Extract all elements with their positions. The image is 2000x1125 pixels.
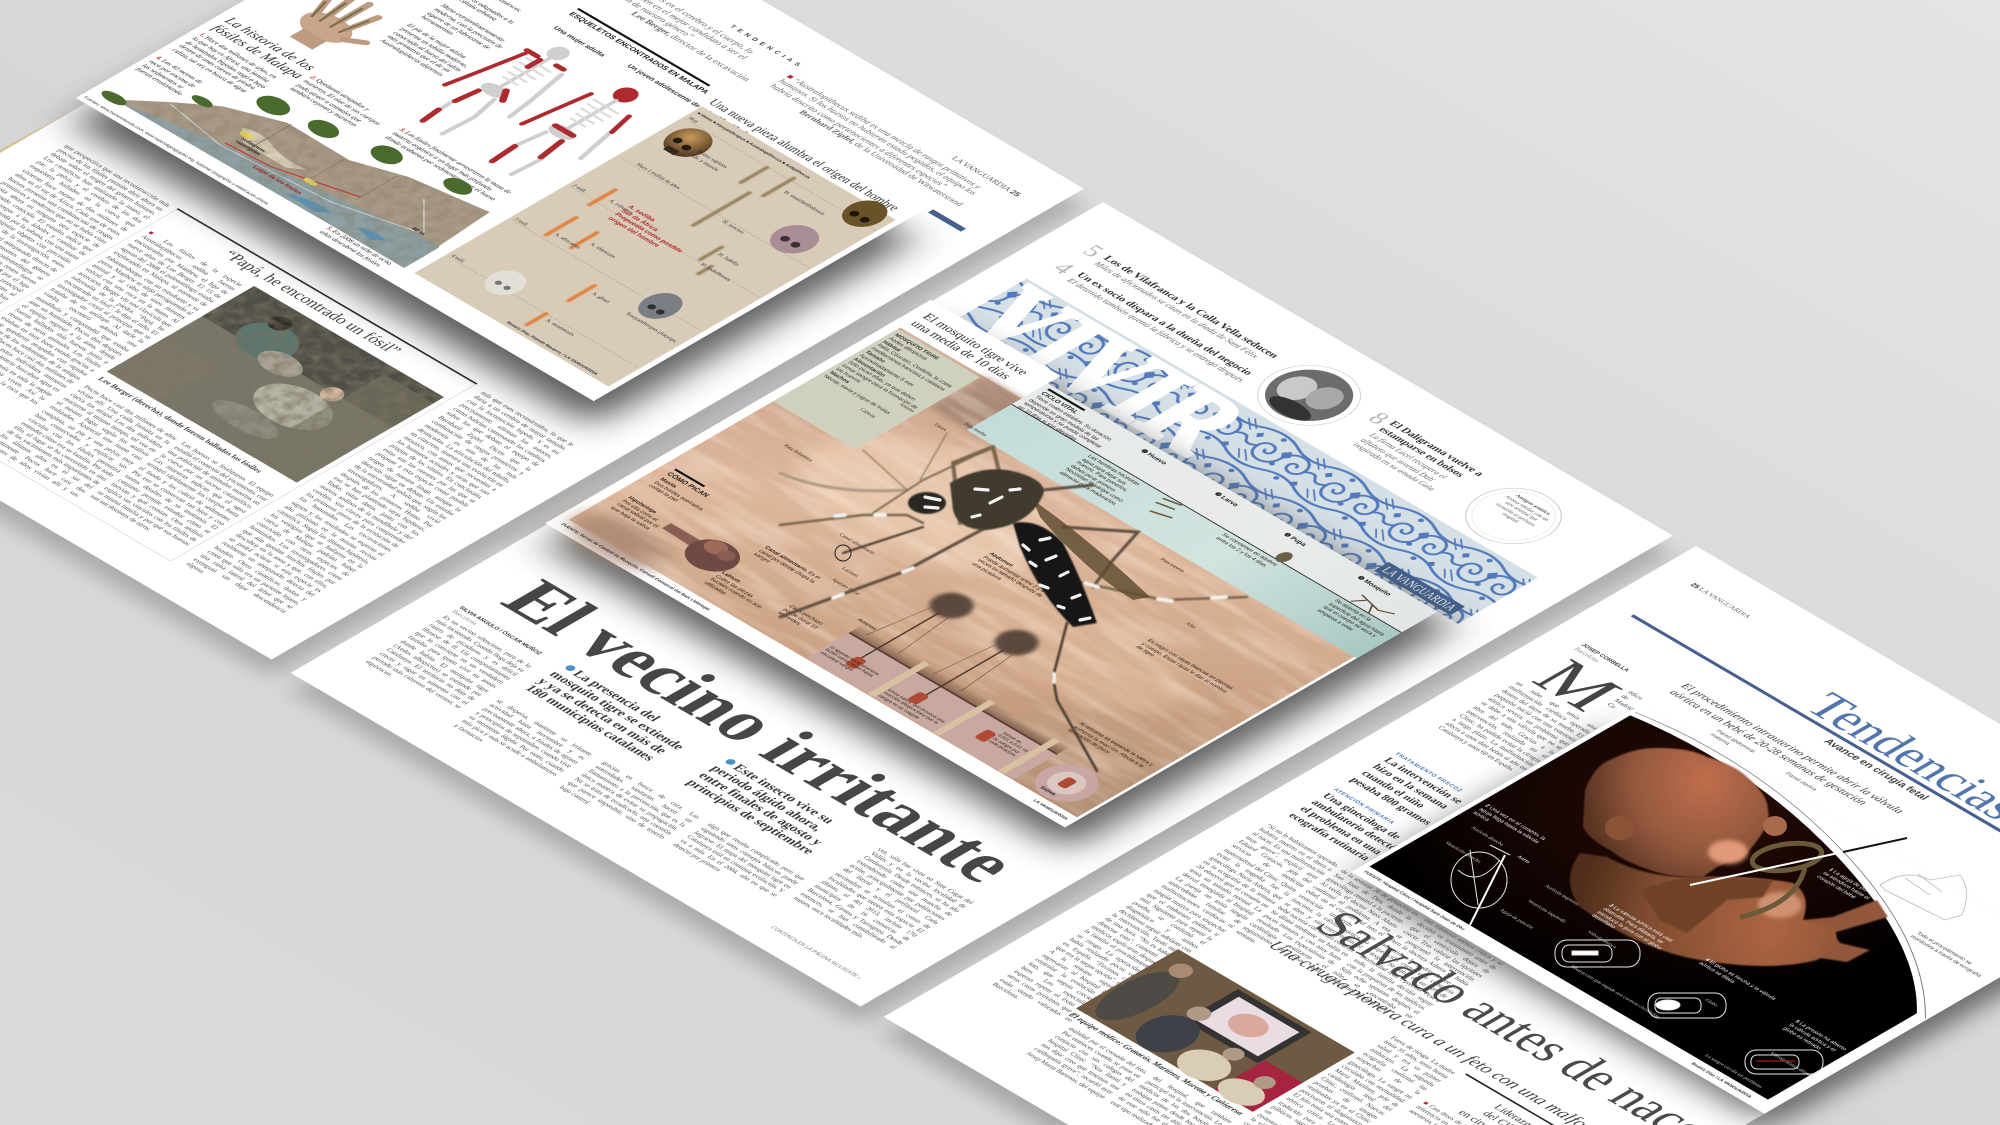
source credit: FUENTE: Hospital Clínic / Hospital Sant Joan de Déu <box>1363 870 1467 931</box>
time labels: 3 mill. <box>512 217 530 228</box>
panel: mosquito facts: Sólo pican ellas, ya que deben tomar sangre para la formación de los huevos <box>834 360 919 410</box>
label: pared abdominal: Pared abdominal materna <box>1708 729 1756 754</box>
species labels: Kenyanthropus platyops <box>624 312 679 344</box>
deck 2: entre finales de agosto y <box>695 770 827 847</box>
floating card: fetal surgery infographic <box>1345 694 2000 1121</box>
red callout: A. sediba: Sur de África <box>619 208 660 232</box>
panel: mosquito facts: Machos <box>828 371 851 384</box>
deck 1: 180 municipios catalanes <box>522 683 659 763</box>
step captions <box>1431 735 1996 1065</box>
text: labium <box>699 571 778 617</box>
article column 1: Es un vecino silencioso, pero de lo más incómodo. Cuando llega deja su rastro de picaduras y es difícil librarse de él. Un comportamiento que lo convierte en un verdadero fastidio para quien vive en zonas donde habita. El mosquito tigre (Aedes albopictus) se extiende por Catalunya. El territorio no deja de crecer y sigue en aumento con el periodo más caluroso del verano; se equivocan. <box>363 615 533 710</box>
title: La historia de los fósiles de Malapa: fósiles de Malapa <box>207 23 307 81</box>
illustration label: sedimentos: Sedimentos <box>239 137 267 153</box>
mosquito abdomen <box>1013 522 1097 627</box>
mosquito head <box>908 492 946 514</box>
note: ecografía: Todo el procedimiento se monitoriza a través de ecografía <box>1909 931 1983 978</box>
text column: bones explained: Mano extraordinariamente moderna, con la precisión de agarre de un fabricante de herramientas <box>418 3 507 50</box>
article intro: un niño que tenía una malformación cardíaca operada dentro del útero de su madre. El pequeño nació con una estenosis aórtica severa, un problema que se debe a una válvula que no se abre del todo. Gracias a la intervención, realizada en el Clínic, ha podido evitar la cirugía a largo plazo. La malformación afecta a unos diez bebés al año en Catalunya y unos 60 en España. <box>1436 681 1599 772</box>
time labels: 4 mill. <box>449 254 467 264</box>
brown species bars <box>641 165 828 274</box>
skeleton: adult woman <box>401 31 597 145</box>
photo caption: El equipo médico: Gratacós, Martínez, Moretta y Cañiaresa <box>1066 1011 1246 1116</box>
umbilical cord <box>1740 839 1823 917</box>
article column 3: una estenosis aórtica crítica y se decidió su tratamiento antes de que el ventrículo dejara de crecer. Tras valorar las opciones se programó la intervención. Pero la doctora Adsera ya había advertido a los padres de que una operación como esta comporta riesgo. “Se habla de un 10% de mortalidad fetal”, precisó. Pese a todo, la familia decidió seguir con la propuesta de los médicos. Sólo ocho semanas después el niño se encontraba en condiciones de nacer sano. <box>1323 918 1505 1020</box>
skeleton subtitle: mujer adulta: Una mujer adulta <box>551 26 606 58</box>
sidebar: atención primaria <box>1286 787 1420 865</box>
quote: Bernhard Zipfel: Bernhard Zipfel, de la Universidad de Witwatersrand <box>797 109 966 208</box>
deck 1 <box>522 662 700 766</box>
sidebar: atención primaria: ATENCIÓN PRIMARIA <box>1331 787 1397 825</box>
fetus belly highlight <box>1758 892 1802 918</box>
deck 1: La presencia del <box>570 668 664 724</box>
mosquito stripes <box>925 489 1090 620</box>
sidebar text: cuando el niño <box>1358 769 1428 810</box>
timeline text 3: 3. Los fósiles finalmente arrastraron la masa de materia orgánica a un lugar más profundo donde acabaron por sedimentarse con el hueso <box>384 127 513 202</box>
panel: mosquito facts: Italia, Cáucaso, Cerdeña, la costa mediterránea francesa y catalana <box>869 343 953 392</box>
box: Liderazgo del Clínic <box>1222 1074 1648 1125</box>
timeline text 2: 2. Quedaron atrapados y murieron. El olor de sus cuerpos pudo atraer a animales que también cayeron y murieron <box>288 75 382 128</box>
text: antenas: Antenas <box>855 618 878 631</box>
text: reaction: Al retirarse se expande la saliva y aumenta la reacción. Afecta a la sensación de picor <box>1066 722 1155 768</box>
panel: mosquito facts: Alimentación <box>851 357 887 378</box>
quote: Lee Berger: Lee Berger, director de la excavación <box>629 10 753 83</box>
page: Vivir mosquito <box>273 201 1688 1025</box>
item 8 number: 8 <box>1362 409 1395 428</box>
item 4 number: 4 <box>1047 259 1080 278</box>
mosquito wing <box>1033 500 1150 600</box>
item 4 subhead: El detenido también quemó la fábrica y se entregó después <box>1064 276 1247 383</box>
source credit: Fuentes: www.homininfossils.com, www.nationalgeographic.org, National Geographic y elaboración propia <box>83 95 271 205</box>
title: Una nueva pieza alumbra el origen del hombre: Una nueva pieza alumbra el origen del hombre <box>705 97 904 213</box>
text: canal alimentario: Canal alimentario. Es el canal por donde chupa la sangre <box>751 546 822 584</box>
text: stage 1: El aparato bucal atraviesa la piel varias veces hasta encontrar sangre <box>818 646 880 678</box>
heart diagram <box>1451 845 1510 925</box>
timeline text 5: 5. En 2008 un niño de ocho años descubrió los fósiles <box>318 226 393 268</box>
sidebar text column 3: Los huesos se fosilizaron. El equipo estudió el contexto del yacimiento, con una población de animales muertos en la cueva por un suceso catastrófico. Las muestras indican que el agua arrastró rápidamente los cuerpos hasta el fondo y los cubrió de sedimento. Por eso se conservan tan bien y con tantos detalles de su anatomía. El conjunto permite estudiar cómo se movían y qué comían. Otro análisis explica sus vínculos con los fósiles de su misma familia y por qué sus huesos son tan distintos de otros. <box>88 441 276 547</box>
credit: Beatriz Díaz, Ramón Navarro, / LA VANGUARDIA <box>505 321 600 376</box>
skull: Ardipithecus <box>476 266 535 300</box>
sidebar text <box>1286 792 1412 865</box>
heart labels: Globo <box>1703 998 1720 1008</box>
floating card: fossil infographics <box>52 0 954 427</box>
panel: mosquito facts: MOSQUITO TIGRE <box>893 333 940 361</box>
circular note: Antiguo asiático <box>1513 494 1552 516</box>
headline: El vecino irritante: El vecino irritante <box>484 569 1038 893</box>
icon: proboscis cross-section <box>646 517 751 578</box>
panel: mosquito facts: Aproximadamente 5 mm <box>857 354 915 387</box>
species labels: A. ghari <box>589 292 611 304</box>
illustration: Malapa cave cross-section <box>109 100 490 268</box>
article column 2: se dispersa, mantiene su irritante actividad hasta noviembre y es precisamente ahora, a finales de agosto y principios de septiembre, cuando vive su momento álgido. Por tanto, cuando más pica y más se acude a ambulatorios y farmacias. <box>452 699 594 777</box>
item 5 subhead: Miles de aficionados se citan en la diada de Sant Fèlix <box>1091 260 1262 359</box>
skull: Homo sapiens <box>653 122 723 163</box>
stage text: adult: Se asienta en la superficie del agua hasta que el cuerpo se seca y empieza a volar. <box>1315 599 1386 638</box>
text: maxila: Maxila <box>658 477 678 489</box>
sidebar text: hizo en la semana <box>1370 763 1452 811</box>
skull: Homo neanderthalensis <box>833 195 897 232</box>
stage text: pupa: Se convierten en adultos entre los 2 y los 4 días. <box>1214 533 1278 568</box>
article column 3: gracias en busca de cura. Las autoridades sanitarias hacen un llamamiento a la prevención, que es la única manera de evitar su propagación. No se trata de erradicarlo, una cuestión que parece imposible, sino de tenerlo bajo control. <box>558 761 701 840</box>
skeleton subtitle: joven adolescente: Un joven adolescente de entre 10 y 13 años <box>625 64 756 140</box>
valve diagram 2 <box>1648 993 1726 1018</box>
continuation note: CONTINÚA EN LA PÁGINA SIGUIENTE » <box>769 925 864 980</box>
text: abdomen: Puede aumentar entre 2 y 4 veces su tamaño después de una picadura <box>970 555 1047 598</box>
drop cap M: M <box>1516 650 1639 721</box>
orange species bars <box>455 190 687 325</box>
anatomical labels <box>691 381 1257 711</box>
valve diagram 1 <box>1555 940 1640 967</box>
panel: mosquito facts: Tamaño <box>863 350 887 364</box>
photo: medical team <box>1073 949 1355 1113</box>
text: step 1: 1 La aguja de punción se introduce hasta el corazón del bebé <box>1815 868 1880 900</box>
floating card: mosquito infographic <box>526 300 1471 851</box>
masthead: 25 LA VANGUARDIA <box>1688 582 1753 620</box>
photo caption: Lee Berger (derecha), donde fueron hallados los fósiles <box>96 375 264 474</box>
text column: bones explained: El pie de la mujer adulta presenta un tobillo moderno, conectado al hueso del talón más primitivo que el de un Australopithecus afarensis <box>378 23 470 77</box>
life-cycle heading <box>1047 389 1086 411</box>
timeline text 1: 1. Hace dos millones de años, en lo que hoy es África, una familia de homínidos bípedos vagó o bajó dentro de unas cuevas de piedra caliza, tal vez en busca de agua <box>170 32 278 94</box>
text: step 3: 3 La válvula aórtica está casi obstruida. Para dilatarla, se introduce la guía con el globo desinflado <box>1589 903 1674 950</box>
item 8 text: La firma Lacel recupera el alfabeto que inventó Dalí inspirado en su amada Gala <box>1351 432 1449 492</box>
text: step 4: 4 El globo se hincha y la válvula aórtica se dilata <box>1697 958 1777 1001</box>
legend: ■ Homo ■ Kenyanthropus ■ Australopithecus ■ Ardipithecus <box>696 111 812 179</box>
text: abdomen <box>958 552 1061 612</box>
anatomical labels: Labium <box>840 567 860 579</box>
title: La historia de los fósiles de Malapa: La historia de los <box>220 15 320 73</box>
sidebar: tratamiento precoz: TRATAMIENTO PRECOZ <box>1393 752 1463 793</box>
text: stage 3: Toman de 0,001 a 0,01 ml de sangre por cada picadura <box>986 731 1028 757</box>
deck: El procedimiento intrauterino permite abrir la válvula <box>1677 681 1907 816</box>
stage texts: Las hembras necesitan agua para dejar sus huevos. Para ponerlos, deben picar primero. Necesitan la sangre como alimento para madurarlos. <box>1057 454 1141 507</box>
mosquito thorax <box>950 469 1044 530</box>
black panel <box>1370 712 2000 1100</box>
blue rule <box>1631 614 2000 905</box>
time labels: Hace 1 millón de años <box>634 163 682 190</box>
fetus arm <box>1640 877 1773 933</box>
skeleton: adolescent <box>473 74 667 187</box>
illustration: fetus <box>1431 735 1996 1074</box>
card title: El mosquito tigre vive <box>919 311 1033 377</box>
anatomical labels: Pata trasera <box>1158 557 1186 574</box>
text: abdomen: Abdomen <box>987 552 1014 568</box>
anatomical labels: Antena <box>897 402 916 414</box>
text: maxila: Dos bordes aserrados cortan la piel <box>646 481 705 511</box>
sidebar text: el problema en una <box>1297 805 1385 857</box>
fetus body <box>1570 853 1837 966</box>
heart labels: Válvula aórtica <box>1585 930 1619 950</box>
heart labels: Ventrículo derecho <box>1443 841 1483 864</box>
text: step 2: 2 Una vez en el corazón, la aguja llega hasta la válvula aórtica <box>1471 804 1547 844</box>
panel: life cycle strip <box>967 383 1437 658</box>
text: labium: Cubre las piezas bucales cuando no son utilizadas <box>702 574 763 610</box>
card title: una media de 10 días <box>907 318 1015 381</box>
black rule: skeletons heading <box>577 8 711 86</box>
fetus hand <box>1763 816 1787 836</box>
life-cycle title: CICLO VITAL <box>1039 391 1080 415</box>
drop cap column: édico de Madrid. Ca <box>1605 690 1644 713</box>
species labels: A. afarensis <box>588 242 618 260</box>
red callout: A. sediba: A. sediba <box>626 204 657 223</box>
byline city: Barcelona <box>1572 647 1601 663</box>
pupa icon <box>1272 550 1296 564</box>
circular note <box>1446 477 1581 555</box>
arc and dark panel <box>1518 708 2000 1018</box>
anatomical labels: Tórax <box>932 422 948 432</box>
species labels: A. anamensis <box>543 318 576 337</box>
red callout: A. sediba: Propuesta como posible origen del hombre <box>606 212 684 254</box>
graphic credit: Beatriz Díaz / LA VANGUARDIA <box>1690 1062 1754 1099</box>
deck 2: principios de septiembre <box>683 777 818 856</box>
species labels: Áfr. y mundo <box>688 153 722 172</box>
heart labels: Ventrículo izquierdo <box>1525 899 1568 924</box>
page: Malapa fossils spread <box>0 0 1099 678</box>
trees <box>97 31 478 253</box>
item 5 headline: Los de Vilafranca y la Colla Vella seducen <box>1100 254 1281 360</box>
page: Tendencias fetal surgery <box>868 546 2000 1125</box>
section label: Tendencias: TENDENCIAS <box>728 24 805 69</box>
larva icons <box>1145 496 1188 521</box>
banner label: La Vanguardia: LA VANGUARDIA <box>1378 565 1461 613</box>
time labels: 2 mill. <box>570 184 588 194</box>
byline: JOSEP CORBELLA <box>1579 643 1631 673</box>
circle: saliva reaction: Saliva <box>1038 786 1058 797</box>
sidebar: tratamiento precoz <box>1347 752 1476 827</box>
anatomical labels: Aparato bucal <box>829 578 862 597</box>
masthead: La Vanguardia 25: LA VANGUARDIA 25 <box>950 155 1023 198</box>
text: rayas: Es negro con rayas blancas en piernas y cuerpo. Estas rayas le dan el nombre de tigre <box>1134 639 1234 694</box>
deck 2: Este insecto vive su <box>730 762 839 826</box>
text: stage 2: Envía saliva, que provoca una reacción alérgica para que la sangre no se coagule <box>876 689 946 725</box>
fetus legs and feet <box>1803 900 1888 962</box>
item 4 headline: Un ex socio dispara a la dueña del negocio <box>1074 271 1255 377</box>
fetus head <box>1583 748 1769 877</box>
species labels: H. rudolfensis <box>698 262 734 283</box>
source credit: FUENTE: Servei de Control de Mosquits, Consell Comarcal del Baix Llobregat <box>560 522 712 611</box>
sidebar text: Una ginecóloga de <box>1319 792 1404 841</box>
article column 5: vez, sólo fue visto en Sant Cugat del Vallès y en la vecina localidad de Cerdanyola. Desde entonces, se ha ido extendiendo como una mancha de aceite, principalmente por poblaciones del litoral y el prelitoral. Cada noviembre se actualiza el censo de localidades que tienen esta especie. El último, el del 2013, incluía 170 municipios de 16 comarcas de Barcelona, Girona y Tarragona. Desde entonces, se han contabilizado al menos, once localidades más. <box>791 847 975 950</box>
deck: aórtica en un bebé de 20-28 semanas de gestación <box>1667 688 1870 807</box>
red callout: A. sediba <box>588 204 701 270</box>
quote: Bernhard Zipfel: ■ “Australopithecus sediba es una mezcla de rasgos primitivos y humanos. Si los huesos no hubieran estado pegados, el equipo los habría descrito como pertenecientes a diferentes especies” <box>768 73 984 196</box>
photo: Lee Berger in the field <box>107 286 444 482</box>
species labels: H. habilis <box>716 253 741 267</box>
item 8 headline: El Daligrama vuelve a <box>1386 420 1486 478</box>
quote: Lee Berger <box>590 0 779 88</box>
blue accent rule <box>928 209 966 232</box>
species labels: H. neanderthalensis <box>782 190 827 217</box>
item 5 number: 5 <box>1076 242 1109 261</box>
item 8 headline: estamparse en bolsos <box>1376 426 1467 479</box>
folded tan paper <box>0 112 70 184</box>
heart labels: Obstrucción que impide una correcta circulación <box>1569 965 1662 1019</box>
circular note: Aroma similar con un aire oriental que recuerda al perfume original <box>1494 494 1550 527</box>
section banner: Vivir azulejo <box>932 268 1557 632</box>
text: hipofaringe: Hipofaringe <box>626 496 658 515</box>
time labels <box>449 116 748 290</box>
species labels: A. robustus <box>607 199 636 216</box>
heart labels <box>1391 826 1860 1100</box>
icon: fossil hand <box>276 0 401 62</box>
byline: SILVIA ANGULO / ÓSCAR MUÑOZ <box>457 605 545 656</box>
mosquito head, stage 2 <box>985 625 1048 661</box>
sidebar text: ambulatorio detectó <box>1308 798 1401 852</box>
heart labels: Aguja de punción <box>1498 908 1535 930</box>
byline city: Barcelona <box>450 609 479 626</box>
illustration: tiger mosquito <box>780 433 1247 771</box>
stage: mosquito: ❺ Mosquito <box>1355 575 1393 597</box>
panel: human evolution chart <box>414 102 903 387</box>
article column 1: “Si no le hubiéramos operado, hubiera muerto en el útero o al nacer. Es una malformación muy grave”, explicó ayer Eduard Gratacós, jefe del servicio de medicina maternofetal del Clínic. Quien evitó la tragedia fue la ginecóloga Nuria Adsera, que en la ecografía de la semana 20 observó que el corazón no tenía un tamaño normal. La derivó enseguida al hospital. La pareja no tenía ningún antecedente familiar de malformaciones cardíacas ni ningún motivo para sospechar que el embarazo pudiera ir mal. Siguiente para repetir la prueba, se confirmó el diagnóstico y ambos decidieron seguir adelante con la intervención. Tardó menos de una hora. “No es habitual detectar esto”, comentó. Los médicos explicaron después a la familia el procedimiento y su riesgo. La operación se había realizado pocas veces en España. “Tuvimos claro que era la mejor opción”, dijo. A la semana siguiente regresaron al hospital para controlar la evolución del feto, que seguía creciendo bien. Los especialistas esperan repetir el éxito con otros casos próximos que ya están siendo valorados en Barcelona. <box>991 823 1341 1023</box>
graphic credit: LA VANGUARDIA <box>1032 799 1070 821</box>
panel: mosquito facts: Aedes albopictus <box>887 336 929 361</box>
section title: VIVIR: VIVIR <box>938 271 1279 470</box>
illustration label: depth: 40 m <box>409 227 426 236</box>
species labels: Homo sapiens <box>695 150 729 170</box>
heart labels: Válvula aórtica dilatada <box>1768 1051 1817 1080</box>
photo: mosquito on skin <box>553 328 1409 826</box>
heart labels: Aurícula izquierda <box>1543 884 1582 907</box>
heart labels: Aurícula derecha <box>1469 826 1506 847</box>
species labels <box>472 144 862 370</box>
sidebar text: La intervención se <box>1381 756 1466 806</box>
text: labium: Labium <box>719 571 742 584</box>
article column right: más que esos reconstruidos, lo que le daría a un cerebro de mayor tamaño, con la locomoción bípeda. Y es así precisamente, afirman los autores, como habrían comenzado las cambios sobre los que debate el equipo de Bernhard Zipfel. Dicen que la combinación de rasgos primitivos y modernos es una de las más destacadas. La articulación del tobillo, en concreto, muestra una evolución en mosaico, con zonas que recuerdan a los humanos actuales y otras que son propias de los simios. En conclusión, estas son las razones por las que se propone a esta especie como posible origen de nuestro linaje, aunque la datación sigue en debate. Un estudio de la universidad señala que, según los investigadores, A. sediba vivió después de los primeros Homo. Por eso se han planteado otras hipótesis. Todos estos datos, junto con los nuevos análisis de la mandíbula y del cerebro, son claves para comprender los primeros pasos de la evolución de los homínidos. Las excavaciones siguen y los resultados se esperan el año próximo en la misma revista científica. Según las últimas hipótesis, los vestigios que se hallaron en la cueva de Malapa podrían haber convivido con otras especies de homínidos. Los investigadores creen que aún quedan muchos fósiles por descubrir en la zona y que, con ellos, se podrá aclarar si esta especie es realmente un antepasado directo del hombre. Otros científicos dudan y creen que sólo era un pariente lejano, una rama lateral del árbol que se extinguió sin dejar descendencia alguna. <box>184 391 575 614</box>
text: picada: Cada pinchazo puede durar 10 segundos <box>775 604 824 630</box>
fetus ear <box>1605 816 1635 840</box>
timeline grid <box>449 119 875 367</box>
sidebar text: pesaba 800 gramos <box>1347 776 1435 827</box>
anatomical labels: Cabeza <box>858 408 878 419</box>
circle: saliva reaction <box>1022 757 1112 809</box>
panels: bite stages <box>806 580 1148 779</box>
mouthpart icons <box>844 654 997 744</box>
label: pared uterina: Pared uterina <box>1783 772 1818 792</box>
sidebar text: ecografía rutinaria <box>1286 811 1373 863</box>
heart labels: La sangre circula sin problema <box>1703 1054 1764 1089</box>
article column 4: algo que resulta complicado pero que siguiendo unos consejos básicos puede lograrse. El mapa del mosquito tigre en Catalunya está en continua evolución. Y va a más. En el 2004, año en que se detectó por primera <box>670 822 807 898</box>
species labels: H. erectus <box>720 220 746 235</box>
panel: mosquito facts: Hábitat <box>881 340 902 353</box>
needle <box>1690 838 1907 885</box>
sidebar text <box>1347 756 1469 827</box>
heading: cómo pican: CÓMO PICAN <box>665 471 712 498</box>
deck 2 <box>683 756 855 856</box>
deck 2: periodo álgido ahora, <box>707 763 827 833</box>
text: hipofaringe: Por ella corre el canal salival por el que baja la saliva <box>609 499 659 531</box>
text: hipofaringe <box>596 496 676 542</box>
species labels: A. africanus <box>552 232 583 250</box>
panel: mosquito facts <box>773 329 980 449</box>
mosquito head, stage 1 <box>920 588 983 624</box>
deck 1: y ya se detecta en más de <box>534 676 671 756</box>
heading: esqueletos encontrados en Malapa: ESQUELETOS ENCONTRADOS EN MALAPA <box>567 11 712 95</box>
banner label: La Vanguardia <box>1374 562 1465 615</box>
stage: huevo: ❷ Huevo <box>1139 448 1169 466</box>
text: step 5: 5 La presión ha abierto la válvula aórtica y el globo es retirado <box>1781 1020 1848 1052</box>
timeline text 4: 4. Los 40 metros de roca por encima de los sedimentos se fueron erosionando <box>133 55 204 97</box>
adult icon <box>1350 595 1395 621</box>
kicker: Avance en cirugía fetal: Avance en cirugía fetal <box>1821 737 1932 802</box>
circular photo: Dalí and Gala <box>1236 353 1382 438</box>
anatomical labels: Pata media <box>962 422 988 438</box>
skull: Sahelanthropus <box>629 288 692 324</box>
proboscis lines <box>840 603 1017 706</box>
deck 1: mosquito tigre se extiende <box>546 669 688 752</box>
anatomical labels: Alas <box>1184 621 1197 630</box>
illustration label: lugar de los fósiles: Lugar de los fósiles <box>251 165 303 196</box>
article column 2: de la semana 20 de gestación en San Joan de Déu, donde la ginecóloga remitió a la paciente. Al verlo, el doctor Nuss Abans confirmó el problema. A esa edad, en el corazón del feto el ventrículo izquierdo apenas funciona, la válvula aórtica no se abre, y sin intervención el bebé nacería con medio corazón. Se dilató mediante un balón en pocos minutos y con muy buen resultado. Los especialistas de cardiología realizaron el seguimiento del caso cada semana. <box>1233 869 1421 974</box>
anatomical labels: Pata delantera <box>782 444 814 463</box>
valve diagram 3 <box>1745 1050 1823 1074</box>
sidebar: Papá, he encontrado un fósil <box>0 208 478 561</box>
illustration label: sedimentos: sumergidos <box>233 140 262 156</box>
bite marker <box>835 545 851 561</box>
fetus face light <box>1708 840 1748 864</box>
sidebar heading: “Papá, he encontrado un fósil” <box>219 248 406 357</box>
mosquito legs <box>780 433 1247 771</box>
text column: bones explained <box>336 0 551 109</box>
anatomical labels: Canal alimentario <box>837 533 876 556</box>
skull: Homo erectus <box>760 219 829 259</box>
text: maxila <box>632 477 717 527</box>
time labels: Hoy <box>686 116 700 124</box>
panel: mosquito facts: Néctar, savia y jugos de frutas <box>822 374 892 415</box>
heart labels: Aorta <box>1515 855 1532 865</box>
sketch: hand with ultrasound probe <box>1880 874 1967 920</box>
stage: pupa: ❹ Pupa <box>1281 531 1309 548</box>
stage: larva: ❸ Larva <box>1212 491 1241 508</box>
